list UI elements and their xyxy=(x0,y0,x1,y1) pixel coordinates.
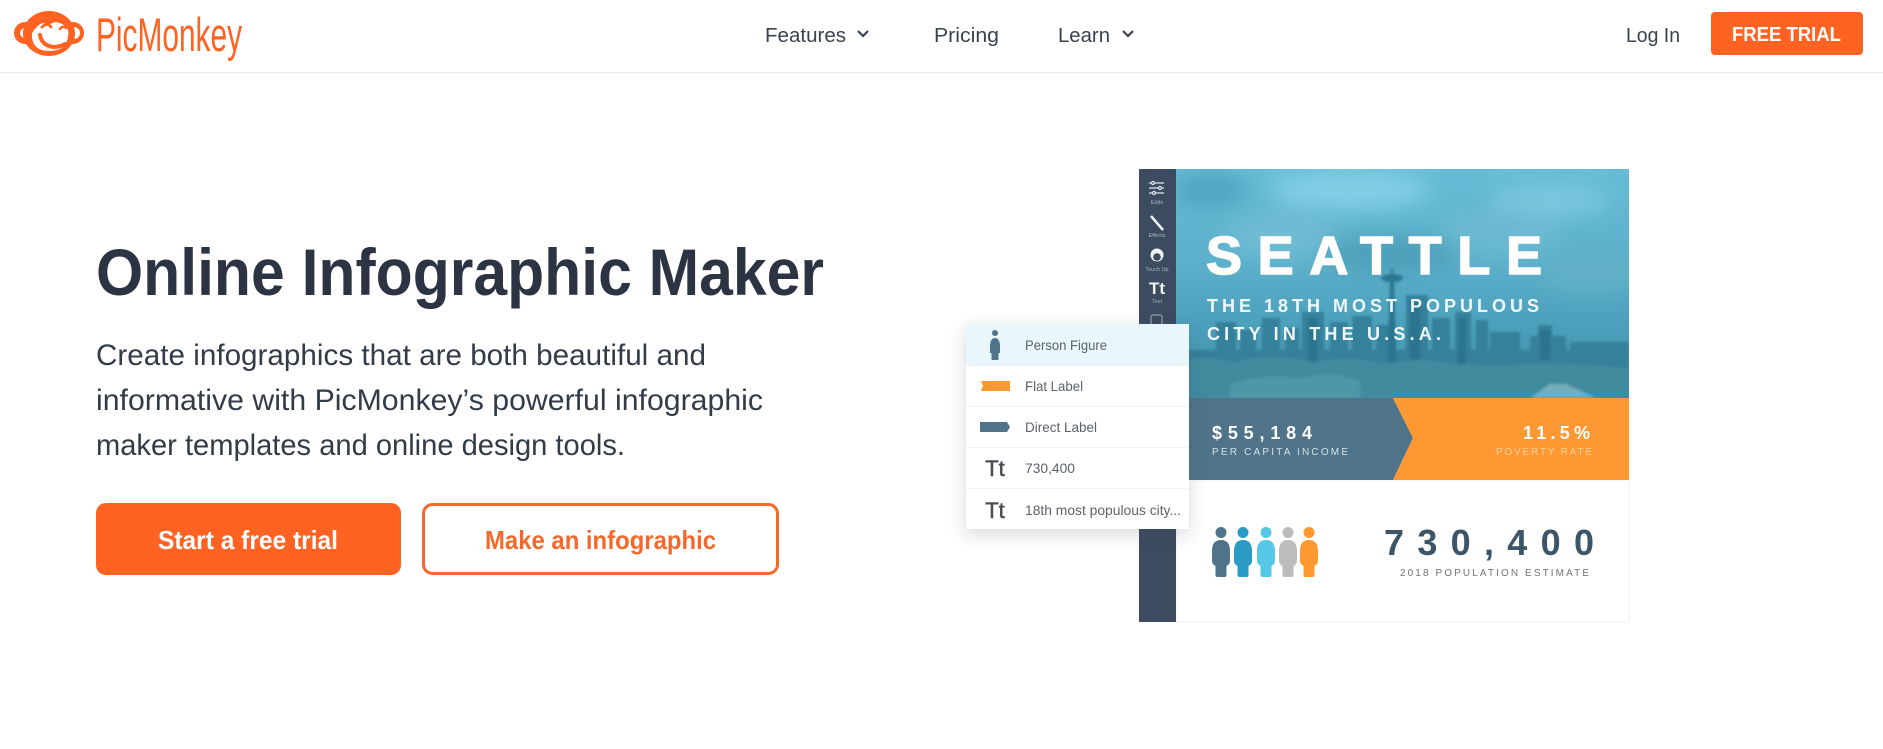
description text: maker templates and online design tools. xyxy=(96,429,625,462)
photo: Seattle skyline xyxy=(1173,169,1640,401)
poverty band xyxy=(1393,398,1629,480)
nav link: Log In: Log In xyxy=(1626,25,1680,47)
editor sidebar: Text xyxy=(1152,299,1163,305)
panel: layers list xyxy=(966,324,1189,529)
layer row: person figure: Person Figure xyxy=(1025,337,1107,353)
title: Online Infographic Maker xyxy=(96,235,824,309)
icon: Features chevron xyxy=(858,31,868,36)
stat: poverty rate: 11.5% xyxy=(1523,423,1590,443)
nav link: Pricing: Pricing xyxy=(934,25,999,47)
icon: Learn chevron xyxy=(1123,31,1133,36)
layer row: person figure xyxy=(966,324,1189,365)
nav link: Learn: Learn xyxy=(1058,25,1110,47)
layer row: flat label xyxy=(981,378,1083,394)
editor sidebar: Touch Up xyxy=(1145,267,1169,273)
nav bar xyxy=(0,0,1883,73)
stat: income xyxy=(1212,423,1348,458)
layer row: population text xyxy=(985,456,1075,481)
editor sidebar: Edits xyxy=(1151,200,1163,206)
nav link: Features: Features xyxy=(765,25,846,47)
trees and foreground xyxy=(1189,358,1628,398)
population caption: 2018 POPULATION ESTIMATE xyxy=(1400,568,1589,579)
editor mockup xyxy=(966,169,1640,622)
stat: poverty rate: POVERTY RATE xyxy=(1496,447,1592,458)
button: start a free trial: Start a free trial xyxy=(158,525,338,555)
heading: SEATTLE: SEATTLE xyxy=(1206,226,1542,286)
description text xyxy=(96,339,763,462)
person icons row xyxy=(1212,527,1318,577)
button: start a free trial xyxy=(96,503,401,575)
button: free trial xyxy=(1711,12,1863,55)
description text: informative with PicMonkey’s powerful infographic xyxy=(96,384,763,417)
income band xyxy=(1176,398,1413,480)
stat: poverty rate xyxy=(1496,423,1592,458)
icon: effects xyxy=(1151,216,1163,230)
editor sidebar xyxy=(1139,169,1176,622)
panel: infographic card xyxy=(1176,480,1629,622)
subheading: most populous: CITY IN THE U.S.A. xyxy=(1207,324,1441,344)
logo wordmark: PicMonkey xyxy=(96,8,242,61)
editor sidebar: Effects xyxy=(1149,233,1166,239)
layer row: flat label: Flat Label xyxy=(1025,378,1083,394)
layer row: direct label xyxy=(980,419,1097,435)
stat: income: PER CAPITA INCOME xyxy=(1212,447,1348,458)
stat: income: $55,184 xyxy=(1212,423,1312,443)
button: free trial: FREE TRIAL xyxy=(1732,24,1841,46)
layer row: direct label: Direct Label xyxy=(1025,419,1097,435)
subheading: most populous xyxy=(1207,296,1539,344)
description text: Create infographics that are both beautiful and xyxy=(96,339,706,372)
space needle xyxy=(1381,268,1403,370)
stat: population: 730,400 xyxy=(1384,522,1594,563)
icon: monkey logo xyxy=(14,11,84,56)
subheading: most populous: THE 18TH MOST POPULOUS xyxy=(1207,296,1539,316)
layer row: heading text: Tt xyxy=(985,498,1005,523)
icon: touch up xyxy=(1150,248,1164,262)
layer row: population text: 730,400 xyxy=(1025,460,1075,476)
layer row: population text: Tt xyxy=(985,456,1005,481)
layer row: heading text: 18th most populous city... xyxy=(1025,502,1181,518)
city buildings xyxy=(1189,294,1629,368)
button: make an infographic: Make an infographic xyxy=(485,525,716,555)
icon: edits xyxy=(1149,182,1164,194)
button: make an infographic xyxy=(424,504,778,574)
layer row: heading text xyxy=(985,498,1181,523)
icon: overlays xyxy=(1151,315,1162,326)
icon: text: Tt xyxy=(1149,279,1165,298)
